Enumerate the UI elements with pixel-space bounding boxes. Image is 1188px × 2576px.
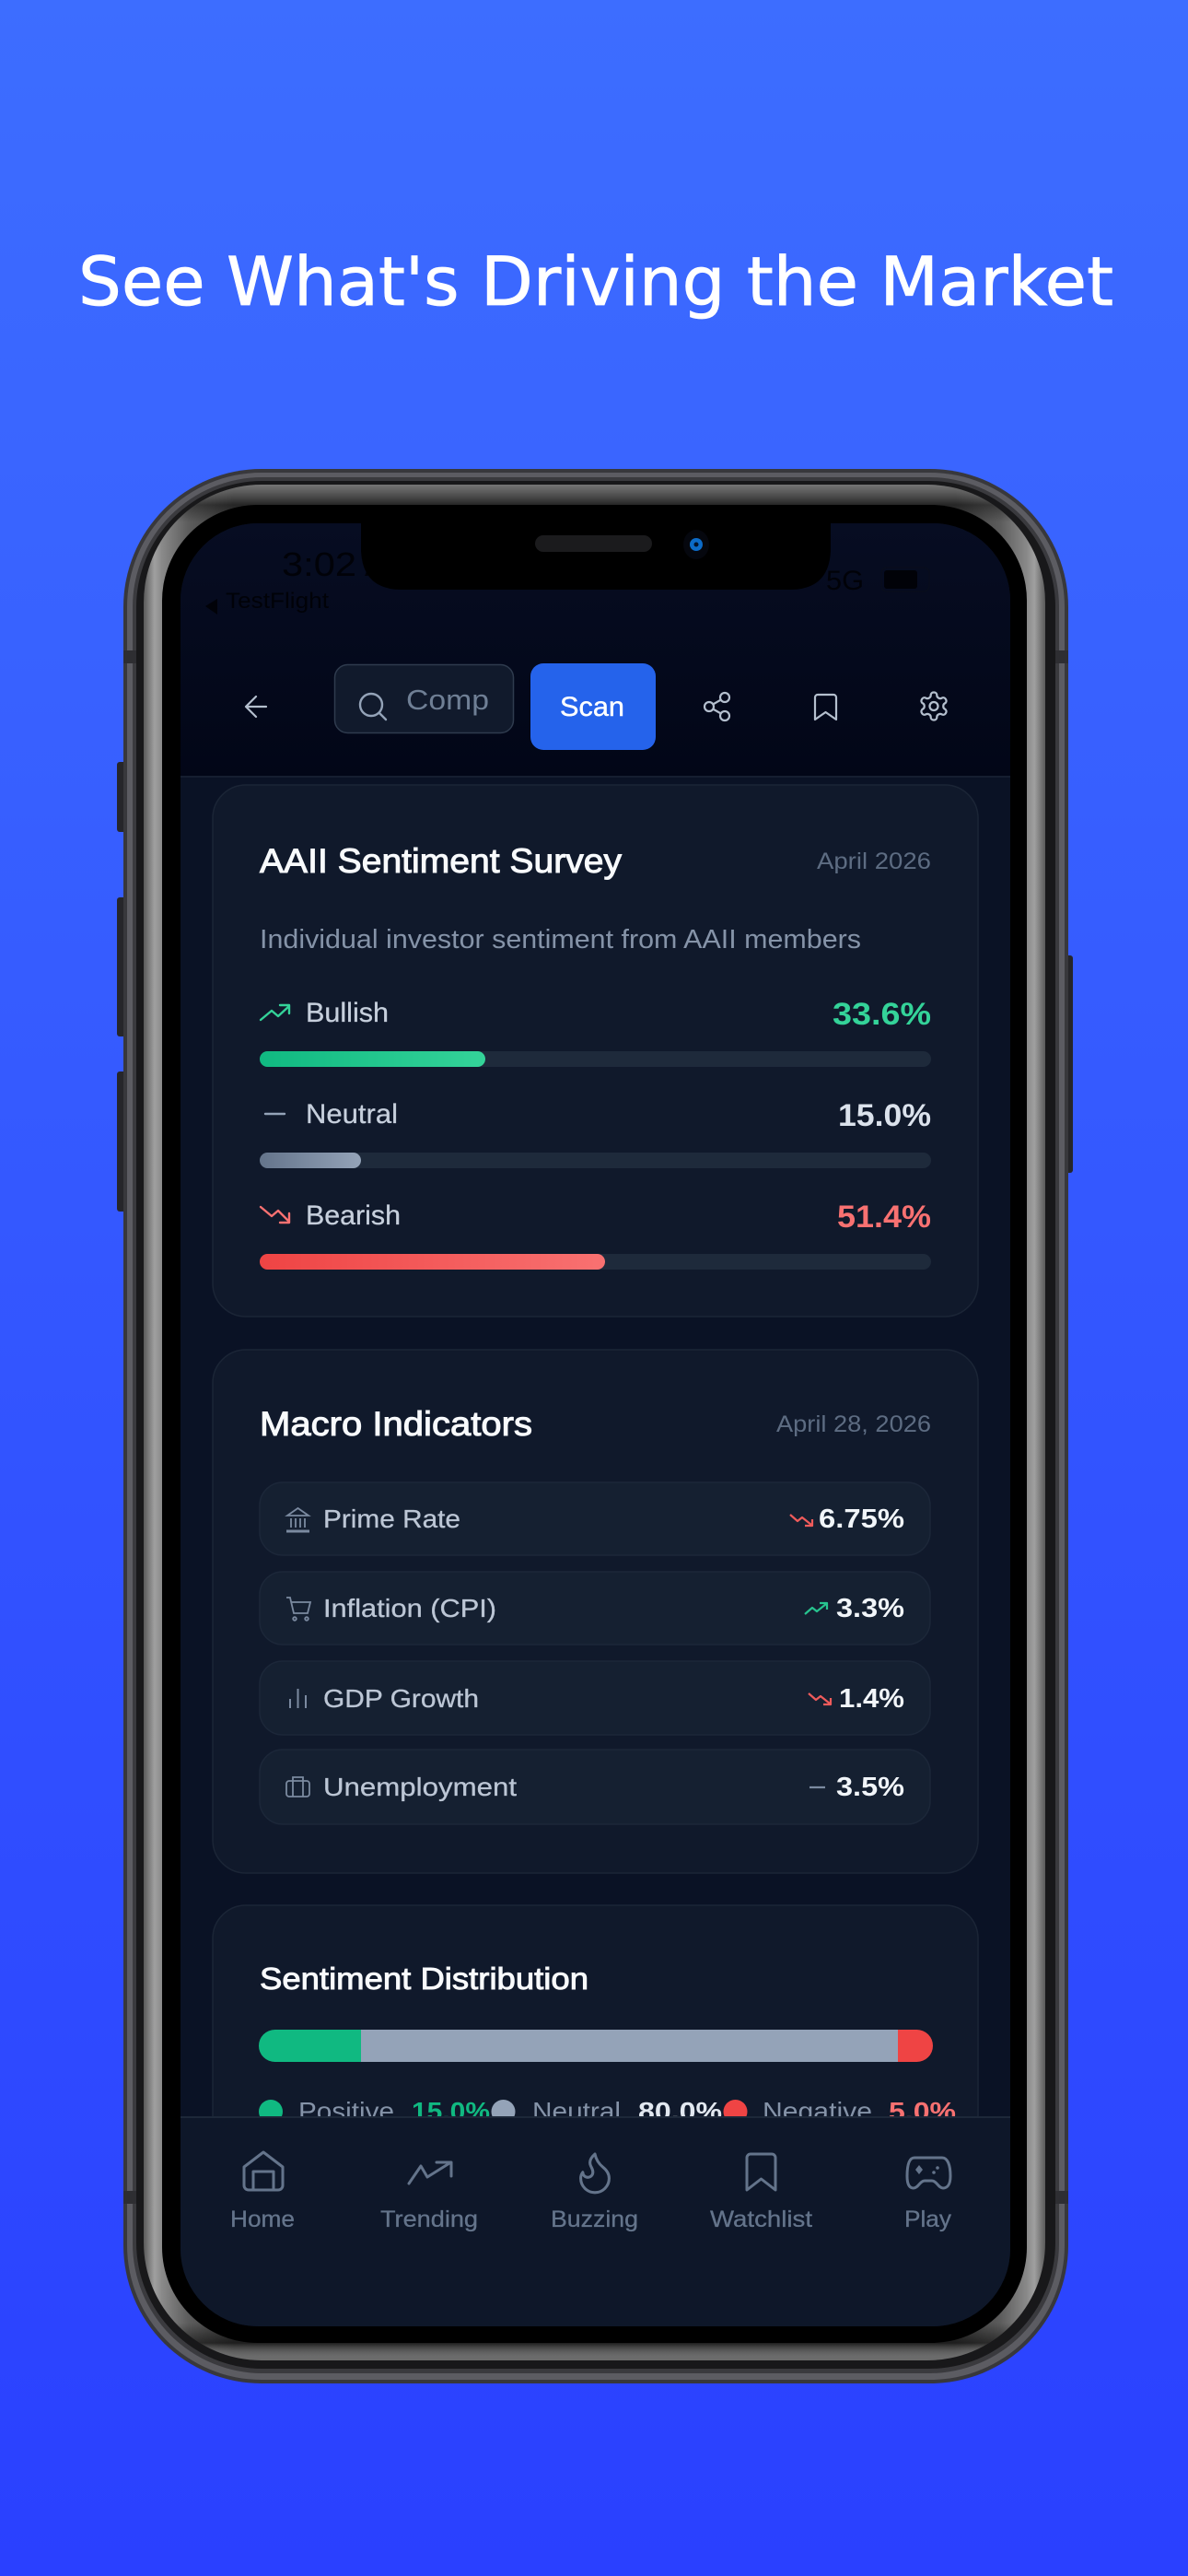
legend: Positive: [298, 2097, 394, 2125]
phone device: [117, 469, 1073, 2383]
row: bearish: Bearish: [306, 1200, 401, 1231]
side buttons: [117, 762, 1073, 1212]
nav: watchlist: [710, 2154, 812, 2232]
row: inflation: Inflation (CPI): [323, 1594, 496, 1622]
row: inflation: [260, 1572, 930, 1645]
nav: play: Play: [904, 2207, 952, 2232]
nav: play: [904, 2158, 952, 2232]
row: unemployment: 3.5%: [836, 1773, 904, 1802]
status bar battery: [884, 570, 917, 589]
row: bearish: 51.4%: [837, 1200, 931, 1235]
row: GDP growth: [260, 1661, 930, 1735]
status bar testflight: TestFlight: [226, 589, 329, 614]
row: bullish: [260, 997, 931, 1067]
date: April 28, 2026: [776, 1411, 931, 1437]
legend: 5.0%: [889, 2097, 956, 2125]
row: prime rate: Prime Rate: [323, 1505, 460, 1533]
search box: [335, 665, 514, 733]
phone frame: [123, 469, 1068, 2383]
scan button: [530, 663, 656, 750]
row: GDP growth: 1.4%: [839, 1684, 904, 1714]
notch with speaker and camera: [361, 516, 831, 590]
title: See What's Driving the Market: [78, 243, 1113, 322]
panel: AAII sentiment survey: [213, 785, 978, 1317]
stacked bar: [259, 2030, 933, 2062]
panel: macro indicators: [213, 1350, 978, 1873]
scan button: Scan: [560, 692, 624, 722]
row: bullish: 33.6%: [833, 997, 931, 1032]
bottom navigation: [181, 2116, 1010, 2329]
row: neutral: 15.0%: [838, 1098, 931, 1133]
status bar testflight: [205, 591, 329, 615]
heading: Macro Indicators: [260, 1405, 532, 1443]
date: April 2026: [817, 849, 931, 874]
row: unemployment: [260, 1750, 930, 1824]
nav: buzzing: Buzzing: [551, 2207, 638, 2232]
heading: Sentiment Distribution: [260, 1961, 588, 1996]
nav: trending: Trending: [380, 2207, 478, 2232]
status bar time: 3:02: [282, 545, 356, 583]
row: prime rate: [260, 1482, 930, 1555]
row: unemployment: Unemployment: [323, 1773, 517, 1801]
nav: buzzing: [551, 2154, 638, 2232]
legend: 80.0%: [638, 2097, 722, 2125]
row: bearish: [260, 1200, 931, 1270]
legend: Neutral: [532, 2097, 621, 2125]
row: bullish: Bullish: [306, 998, 389, 1028]
status bar meridiem: AM: [365, 545, 414, 583]
icon: bookmark: [815, 695, 836, 720]
icon: share: [705, 693, 729, 720]
row: inflation: 3.3%: [836, 1594, 904, 1623]
legend: Negative: [763, 2097, 872, 2125]
legend: 15.0%: [412, 2097, 490, 2125]
row: GDP growth: GDP Growth: [323, 1684, 479, 1713]
panel: sentiment distribution: [212, 1904, 979, 2116]
subtitle: Individual investor sentiment from AAII members: [260, 925, 861, 954]
app header: [181, 553, 1010, 778]
nav: watchlist: Watchlist: [710, 2207, 812, 2232]
legend: [259, 2100, 956, 2116]
icon: settings: [921, 693, 947, 720]
screen: [181, 523, 1010, 2329]
row: neutral: Neutral: [306, 1099, 398, 1130]
row: neutral: [260, 1098, 931, 1168]
icon: back arrow: [246, 697, 266, 717]
status bar network: 5G: [826, 566, 864, 596]
row: prime rate: 6.75%: [819, 1505, 904, 1534]
nav: trending: [380, 2162, 478, 2232]
nav: home: Home: [230, 2207, 295, 2232]
nav: home: [230, 2152, 295, 2232]
search box: Comp: [406, 684, 489, 716]
heading: AAII Sentiment Survey: [260, 842, 623, 880]
